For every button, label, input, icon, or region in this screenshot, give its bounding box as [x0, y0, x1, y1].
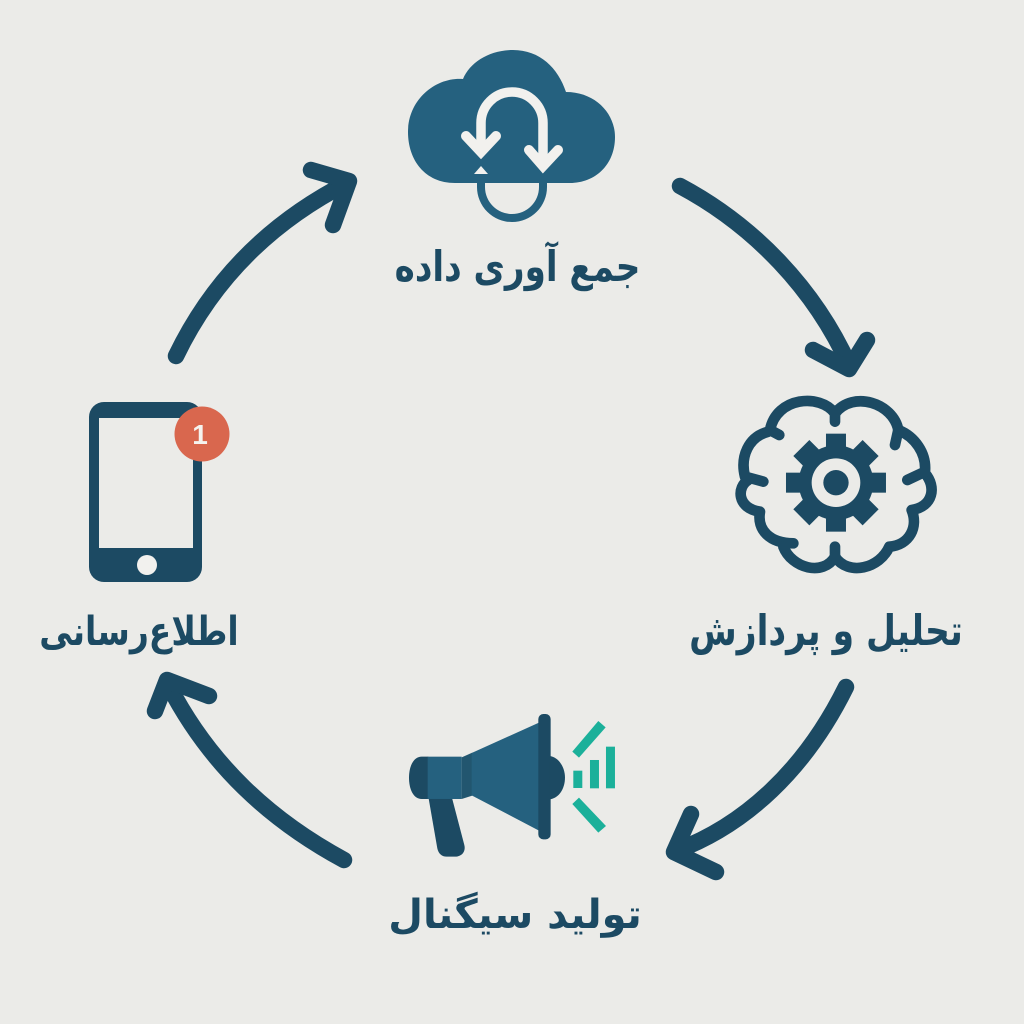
arrow: notification to collection: [176, 170, 349, 356]
icon: megaphone with signal bars: [409, 714, 615, 857]
arrow: collection to analysis: [680, 186, 867, 369]
icon: phone with notification badge: 1: [192, 419, 208, 450]
icon: phone with notification badge: [89, 402, 230, 582]
icon: brain with gear: [741, 401, 932, 568]
arrow: signal to notification: [155, 680, 344, 860]
title: notification label: اطلاع‌رسانی: [39, 608, 239, 655]
title: analysis and processing label: تحلیل و پردازش: [689, 607, 963, 656]
title: signal generation label: تولید سیگنال: [388, 891, 642, 938]
arrow: analysis to signal: [674, 687, 846, 872]
icon: cloud with loop arrows: [408, 50, 615, 222]
title: data collection label: جمع آوری داده: [395, 241, 640, 292]
